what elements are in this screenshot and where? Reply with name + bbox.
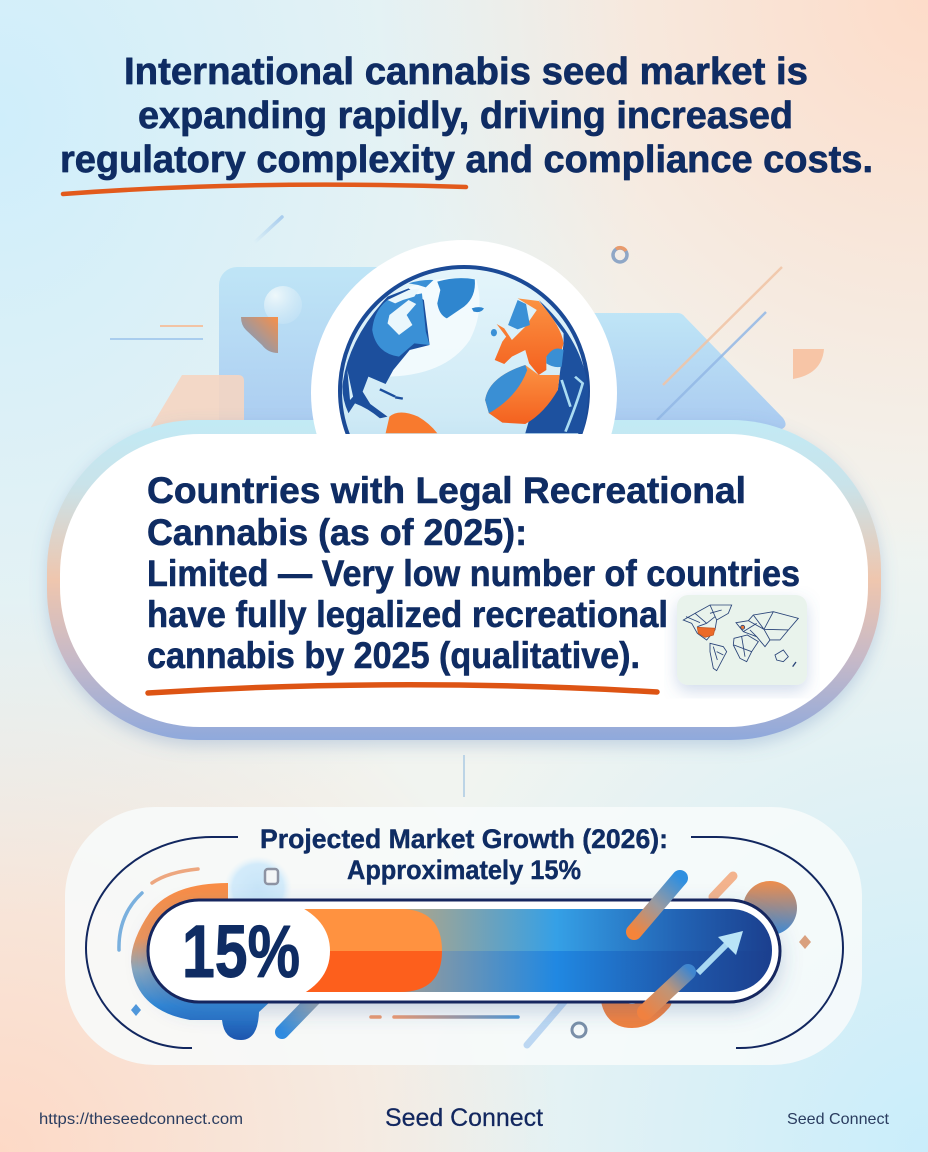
title: International cannabis seed market is (124, 51, 808, 93)
footer (39, 1104, 890, 1132)
decorative shapes behind bar (119, 856, 811, 1045)
europe (495, 298, 564, 375)
icon: world map card (677, 595, 807, 685)
panel text: Cannabis (as of 2025): (147, 511, 527, 553)
title underline (63, 185, 466, 194)
panel: legal recreational cannabis (47, 240, 881, 740)
footer: Seed Connect (385, 1104, 543, 1132)
panel text: cannabis by 2025 (qualitative). (147, 634, 640, 676)
value badge (150, 902, 330, 1000)
panel heading: Approximately 15% (347, 855, 581, 885)
iceland (472, 307, 484, 312)
greenland (437, 278, 475, 318)
panel text: Limited — Very low number of countries (147, 552, 800, 594)
bracket lines (86, 837, 843, 1048)
panel text: have fully legalized recreational (147, 593, 668, 635)
footer: Seed Connect (787, 1111, 890, 1128)
panel heading (260, 824, 668, 885)
value badge: 15% (182, 910, 300, 993)
panel text (147, 469, 800, 676)
title (60, 51, 873, 181)
panel: projected market growth (65, 807, 862, 1065)
north america dark (342, 288, 430, 418)
panel heading: Projected Market Growth (2026): (260, 824, 668, 854)
globe (311, 240, 617, 434)
connector line (463, 755, 465, 797)
bar overlays: slashes and arrow (634, 878, 743, 1012)
south america (386, 412, 437, 433)
sphere highlight (376, 278, 480, 377)
decorative background shapes (110, 217, 824, 457)
title: regulatory complexity and compliance costs. (60, 139, 873, 181)
africa (485, 365, 560, 424)
panel underline (148, 685, 657, 693)
right side dark (525, 300, 588, 433)
footer: https://theseedconnect.com (39, 1111, 243, 1128)
progress bar (148, 900, 780, 1002)
panel text: Countries with Legal Recreational (147, 469, 746, 511)
title: expanding rapidly, driving increased (138, 95, 793, 137)
north america light (372, 293, 430, 357)
